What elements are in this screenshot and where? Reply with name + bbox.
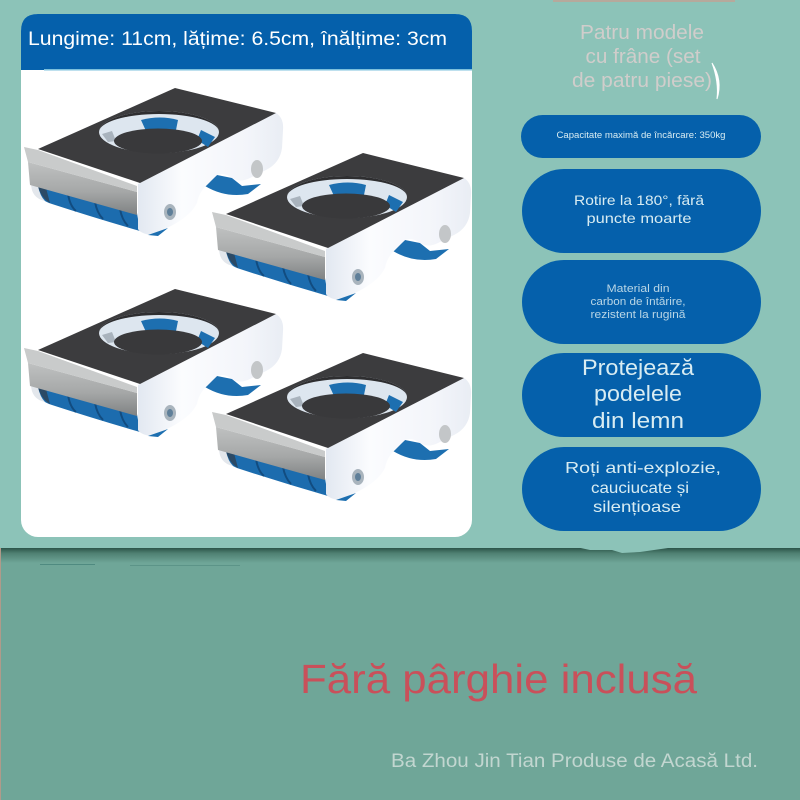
- header bar: dimensions: Lungime: 11cm, lățime: 6.5cm, înălțime: 3cm: [28, 29, 447, 50]
- pill: load capacity: Capacitate maximă de încărcare: 350kg: [556, 130, 726, 140]
- pill: material: rezistent la rugină: [590, 309, 686, 321]
- panel: product photo: [21, 14, 472, 537]
- heading: four models with brakes: Patru modele: [580, 22, 704, 44]
- notice: lever not included: Fără pârghie inclusă: [300, 656, 697, 702]
- pill: wheels: silențioase: [593, 499, 681, 516]
- pill: material: carbon de întărire,: [590, 296, 686, 308]
- company name: Ba Zhou Jin Tian Produse de Acasă Ltd.: [391, 751, 758, 772]
- pill: rotation: [522, 169, 761, 253]
- heading: four models with brakes: cu frâne (set: [586, 46, 701, 68]
- pill: floor protection: Protejează: [582, 355, 695, 380]
- pill: rotation: puncte moarte: [586, 210, 692, 226]
- pill: wheels: Roți anti-explozie,: [565, 460, 721, 477]
- pill: material: Material din: [606, 283, 670, 295]
- top edge strip: [553, 0, 735, 2]
- pill: floor protection: din lemn: [592, 408, 684, 433]
- pill: wheels: cauciucate și: [591, 480, 689, 497]
- heading: four models with brakes: de patru piese): [572, 70, 712, 92]
- pill: rotation: Rotire la 180°, fără: [574, 192, 704, 208]
- pill: floor protection: podelele: [594, 381, 682, 406]
- pill: load capacity: [521, 115, 761, 158]
- product: caster bottom right: [212, 353, 471, 501]
- header bar: dimensions: [21, 14, 472, 70]
- pill: material: [522, 260, 761, 344]
- pill: wheels: [522, 447, 761, 531]
- glare mark: [712, 63, 719, 99]
- pill: floor protection: [522, 353, 761, 437]
- lower band: [0, 547, 800, 800]
- product: caster top right: [212, 153, 471, 301]
- heading: four models with brakes: [572, 22, 712, 92]
- product: caster bottom left: [24, 289, 283, 437]
- product: caster top left: [24, 88, 283, 236]
